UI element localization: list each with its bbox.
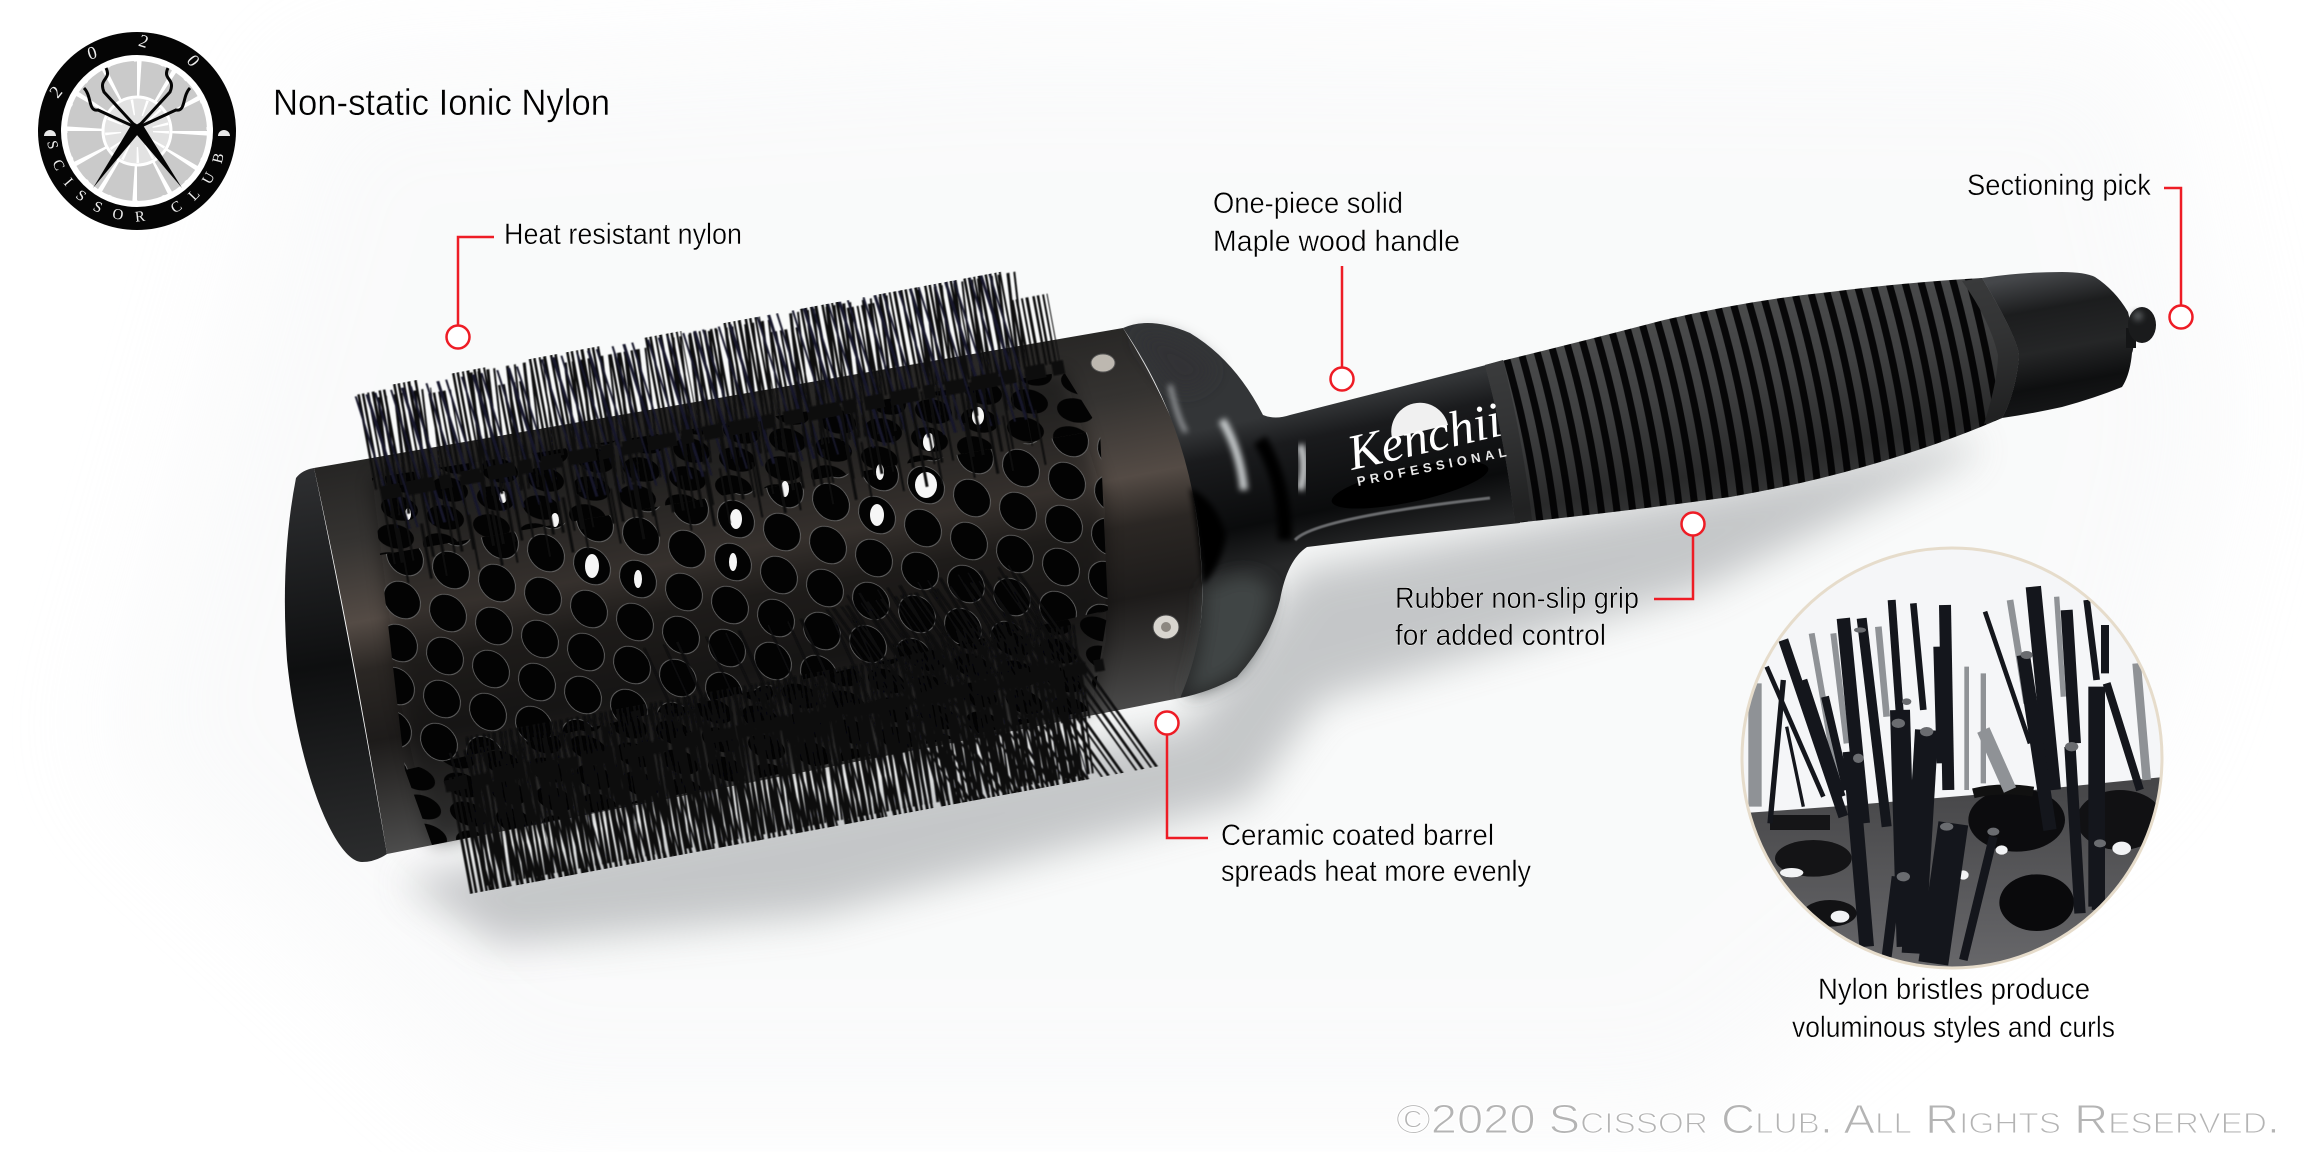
inset barrel surface [1740, 777, 2167, 973]
barrel holes [372, 372, 1108, 845]
callout: heat resistant nylon: Heat resistant nylon [504, 218, 742, 251]
brush shadow [400, 440, 1980, 945]
callout: ceramic barrel: spreads heat more evenly [1221, 855, 1531, 888]
inset: bristle close-up [1740, 547, 2167, 973]
barrel end cap [285, 468, 387, 862]
callout: rubber grip: Rubber non-slip grip [1395, 582, 1639, 615]
top bristle stubs over holes [381, 367, 1076, 557]
ceramic barrel [314, 328, 1202, 854]
bottom bristle third layer [475, 699, 1085, 812]
logo: Scissor Club badge [38, 32, 236, 230]
crossed scissors [84, 68, 190, 188]
title: Non-static Ionic Nylon [273, 82, 610, 123]
lower-right leaning bristles [436, 615, 1106, 796]
inset foreground bristles [1767, 587, 2140, 963]
top bristle tufts [364, 306, 1054, 455]
dome reflections [1135, 334, 1492, 695]
callout: handle: Maple wood handle [1213, 225, 1460, 258]
nylon bristles [364, 306, 1131, 855]
handle neck and dome [1123, 323, 1520, 698]
logo wordmark: Kenchii [1341, 391, 1506, 481]
Kenchii handle logo [1341, 391, 1508, 489]
badge bottom lettering: SCISSOR CLUB [48, 141, 224, 222]
badge top lettering: 2020 [49, 34, 199, 98]
callout: heat resistant nylon [446, 218, 742, 348]
see-through flecks in holes [405, 407, 984, 588]
callout: handle: One-piece solid [1213, 187, 1403, 220]
inset caption [1792, 973, 2115, 1044]
top bristle second layer [383, 332, 1033, 462]
rubber grip [1485, 278, 2019, 523]
copyright: ©2020 Scissor Club. All Rights Reserved. [1396, 1096, 2280, 1142]
sectioning pick knob [2126, 307, 2156, 348]
bottom bristle tufts [460, 724, 1077, 852]
handle cap [1982, 272, 2133, 418]
gear wheel [65, 59, 209, 203]
dark shading behind holes [372, 372, 1106, 845]
callout: sectioning pick [1967, 169, 2192, 328]
callout: rubber grip: for added control [1395, 619, 1606, 652]
callout: ceramic barrel [1156, 712, 1531, 888]
logo fan [1391, 403, 1448, 438]
hair brush photo [285, 272, 2156, 862]
callout: handle [1213, 187, 1460, 390]
callout: sectioning pick: Sectioning pick [1967, 169, 2152, 202]
callout: rubber grip [1395, 512, 1704, 652]
grip end bands and shading [1485, 278, 2019, 523]
inset background bristles [1755, 597, 2147, 807]
inset caption: voluminous styles and curls [1792, 1011, 2115, 1044]
callout: ceramic barrel: Ceramic coated barrel [1221, 819, 1494, 852]
inset bristle tips [1853, 627, 2106, 881]
inset caption: Nylon bristles produce [1818, 973, 2090, 1006]
bottom bristle second layer [466, 702, 1072, 833]
logo subtitle: PROFESSIONAL [1356, 444, 1508, 489]
badge side ornaments [44, 130, 230, 136]
screws [1091, 354, 1179, 639]
top bristle third layer [376, 344, 1025, 464]
badge ring [38, 32, 236, 230]
